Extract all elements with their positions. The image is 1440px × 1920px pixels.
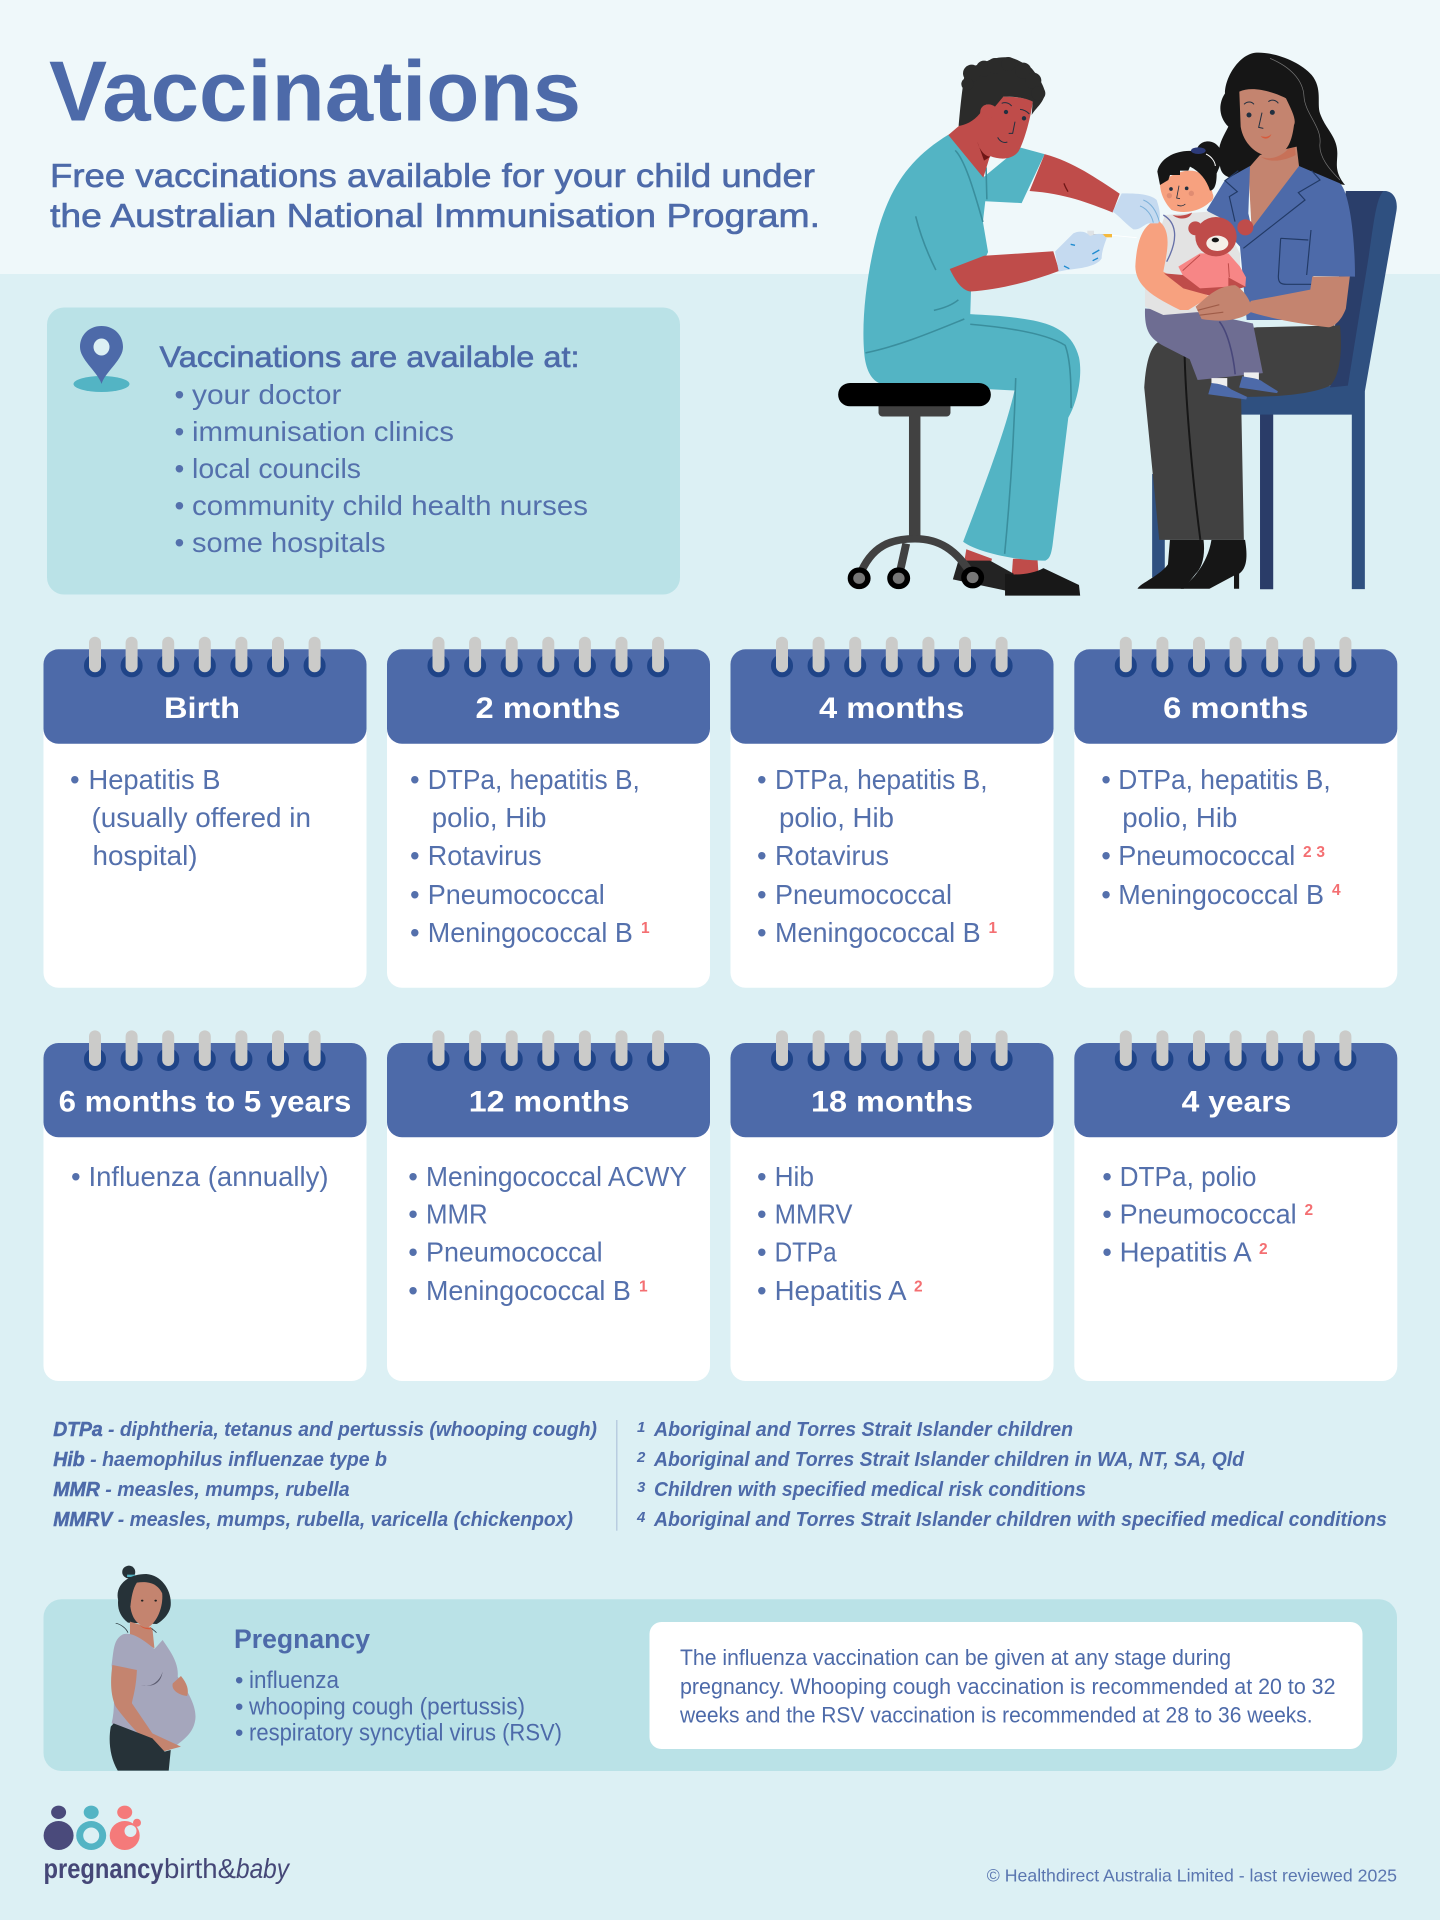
list: 4 months vaccines [757,764,998,948]
panel: pregnancy [44,1566,1397,1771]
nurse head, gloves and syringe [948,57,1137,272]
legend: footnotes: 4 [636,1509,646,1526]
callout: timing: weeks and the RSV vaccination is recommended at 28 to 36 weeks. [679,1703,1313,1728]
subtitle: Free vaccinations available for your child under [50,157,815,194]
list: Birth vaccines [70,764,311,871]
list: locations: • [174,453,184,484]
nurse body and scrubs [863,135,1120,596]
list: locations [174,379,588,558]
legend: abbreviations [53,1419,597,1531]
list: influenza: Influenza (annually) [88,1161,328,1192]
list: 6 months vaccines: Pneumococcal [1118,840,1295,871]
list: 12 months vaccines: MMR [426,1198,488,1230]
heading: 2 months: 2 months [476,692,620,725]
list: 4 years vaccines: DTPa, polio [1120,1161,1256,1192]
list: 12 months vaccines: • [408,1161,418,1192]
legend: footnotes: Aboriginal and Torres Strait Islander children in WA, NT, SA, Qld [653,1449,1245,1471]
copyright: © Healthdirect Australia Limited - last reviewed 2025 [987,1866,1397,1886]
list: 4 years vaccines: Hepatitis A [1120,1236,1252,1268]
list: pregnancy vaccines [235,1667,562,1747]
list: pregnancy vaccines: • [235,1720,243,1747]
list: 2 months vaccines: Pneumococcal [428,879,605,910]
legend: abbreviations: Hib - haemophilus influenzae type b [53,1449,387,1471]
list: 6 months vaccines [1101,764,1341,910]
legend: footnotes: Aboriginal and Torres Strait Islander children with specified medical conditions [653,1509,1387,1531]
heading: available at: Vaccinations are available at: [160,341,580,374]
logo: pregnancy birth and baby [44,1806,291,1884]
list: locations: community child health nurses [192,490,588,521]
list: 4 months vaccines: • [757,879,767,910]
list: 12 months vaccines: • [408,1275,418,1306]
list: 12 months vaccines: Meningococcal ACWY [426,1161,687,1192]
heading: 6 months to 5 years: 6 months to 5 years [59,1086,351,1119]
callout: timing: The influenza vaccination can be given at any stage during [680,1645,1231,1670]
list: 6 months vaccines: 4 [1332,882,1341,899]
card: 6 months to 5 years [44,1030,366,1381]
logo wordmark: baby [236,1853,291,1884]
list: 4 months vaccines: • [757,917,767,948]
list: 4 months vaccines: Pneumococcal [775,879,952,910]
list: 12 months vaccines: • [408,1236,418,1268]
legend: footnotes [636,1419,1387,1531]
subtitle [50,157,820,234]
legend: footnotes: Aboriginal and Torres Strait Islander children [653,1419,1073,1441]
list: 2 months vaccines: • [410,764,420,795]
list: 4 months vaccines: DTPa, hepatitis B, [775,764,988,795]
list: 2 months vaccines: • [410,917,420,948]
list: 18 months vaccines: Hepatitis A [775,1275,907,1306]
heading: 6 months: 6 months [1163,692,1308,725]
list: 2 months vaccines: 1 [641,920,650,937]
list: locations: • [174,490,184,521]
list: locations: your doctor [192,379,342,410]
mother's head and jacket [1207,53,1355,320]
list: 4 years vaccines: 2 [1259,1241,1268,1258]
chair [1152,191,1397,589]
title: Vaccinations [49,44,581,140]
heading: 4 months: 4 months [819,692,964,725]
list: 4 months vaccines: Meningococcal B [775,917,981,948]
list: 12 months vaccines: Meningococcal B [426,1275,631,1306]
list: 6 months vaccines: 2 3 [1303,844,1325,861]
card: 12 months [387,1030,710,1381]
list: Birth vaccines: Hepatitis B [88,764,220,795]
list: 4 months vaccines: • [757,764,767,795]
heading: 12 months: 12 months [469,1086,630,1119]
list: Birth vaccines: (usually offered in [92,802,311,833]
subtitle: the Australian National Immunisation Program. [50,197,820,234]
child's shirt, arm, head and teddy bear [1135,141,1253,315]
list: 6 months vaccines: DTPa, hepatitis B, [1118,764,1331,795]
list: 6 months vaccines: • [1101,764,1111,795]
list: 4 years vaccines: Pneumococcal [1120,1198,1297,1230]
list: 6 months vaccines: Meningococcal B [1118,879,1324,910]
list: 4 months vaccines: • [757,840,767,871]
heading: Pregnancy: Pregnancy [234,1624,370,1654]
legend: footnotes: Children with specified medical risk conditions [654,1479,1086,1501]
card: 6 months [1074,637,1397,988]
card: 18 months [730,1030,1054,1381]
list: pregnancy vaccines: • [235,1693,243,1720]
list: 2 months vaccines: Meningococcal B [428,917,633,948]
list: 18 months vaccines: MMRV [775,1198,853,1230]
callout: timing: pregnancy. Whooping cough vaccination is recommended at 20 to 32 [680,1674,1336,1699]
list: Birth vaccines: • [70,764,80,795]
list: locations: some hospitals [192,527,386,558]
list: 4 years vaccines [1102,1161,1313,1268]
legend: abbreviations: DTPa - diphtheria, tetanus and pertussis (whooping cough) [53,1419,597,1441]
list: 12 months vaccines: • [408,1198,418,1230]
list: 18 months vaccines: Hib [775,1161,814,1192]
callout: timing [650,1622,1362,1749]
card: 4 years [1074,1030,1397,1381]
legend: abbreviations: MMRV - measles, mumps, rubella, varicella (chickenpox) [53,1509,573,1531]
list: influenza: • [71,1161,81,1192]
list: Birth vaccines: hospital) [92,840,198,871]
legend: footnotes: 1 [637,1419,645,1436]
icon: logo figures [44,1806,141,1850]
legend: abbreviations: MMR - measles, mumps, rubella [53,1479,350,1501]
card: 4 months [730,637,1054,988]
list: 6 months vaccines: • [1101,879,1111,910]
list: pregnancy vaccines: respiratory syncytial virus (RSV) [249,1720,562,1747]
list: 2 months vaccines: polio, Hib [432,802,546,833]
list: 6 months vaccines: polio, Hib [1122,802,1237,833]
list: locations: immunisation clinics [192,416,454,447]
list: pregnancy vaccines: whooping cough (pertussis) [248,1693,525,1720]
illustration: pregnant woman [110,1566,196,1771]
list: locations: • [174,379,184,410]
logo wordmark: birth& [164,1853,236,1884]
list: 2 months vaccines [410,764,650,948]
legend: footnotes: 3 [637,1479,646,1496]
heading: 18 months: 18 months [811,1086,973,1119]
list: pregnancy vaccines: • [235,1667,243,1694]
card: 2 months [387,637,710,988]
legend: footnotes: 2 [636,1449,646,1466]
list: 18 months vaccines: • [757,1198,767,1230]
list: pregnancy vaccines: influenza [249,1667,340,1694]
list: locations: local councils [192,453,361,484]
list: 4 months vaccines: 1 [988,920,998,937]
icon: location pin [74,326,130,392]
heading: Birth: Birth [164,692,240,725]
logo wordmark [44,1853,291,1884]
stool [838,383,991,587]
list: 18 months vaccines [757,1161,923,1306]
list: 18 months vaccines: • [757,1161,767,1192]
list: 2 months vaccines: Rotavirus [428,840,542,871]
mother's arm and hands [1196,276,1350,327]
child's trousers and shoes [1145,308,1278,400]
logo wordmark: pregnancy [44,1853,164,1884]
list: 4 months vaccines: polio, Hib [779,802,894,833]
list: 12 months vaccines: Pneumococcal [426,1236,603,1268]
list: 2 months vaccines: • [410,879,420,910]
list: 18 months vaccines: 2 [914,1279,923,1296]
list: 4 years vaccines: • [1102,1236,1112,1268]
list: locations: • [174,527,184,558]
list: 6 months vaccines: • [1101,840,1111,871]
list: 4 years vaccines: • [1102,1161,1112,1192]
list: 4 years vaccines: • [1102,1198,1112,1230]
list: locations: • [174,416,184,447]
list: 12 months vaccines: 1 [639,1279,648,1296]
gloved hand on child's arm [1113,193,1160,229]
mother's lower body [1138,325,1341,589]
heading: 4 years: 4 years [1182,1086,1291,1119]
illustration: nurse vaccinating child on mother's lap [838,53,1397,596]
list: 2 months vaccines: DTPa, hepatitis B, [428,764,640,795]
list: 18 months vaccines: DTPa [775,1236,837,1268]
list: 12 months vaccines [408,1161,687,1306]
list: 18 months vaccines: • [757,1275,767,1306]
list: 4 months vaccines: Rotavirus [775,840,889,871]
list: 4 years vaccines: 2 [1304,1202,1313,1219]
card: Birth [44,637,366,988]
panel: vaccinations available at [47,308,680,594]
list: 2 months vaccines: • [410,840,420,871]
list: 18 months vaccines: • [757,1236,767,1268]
